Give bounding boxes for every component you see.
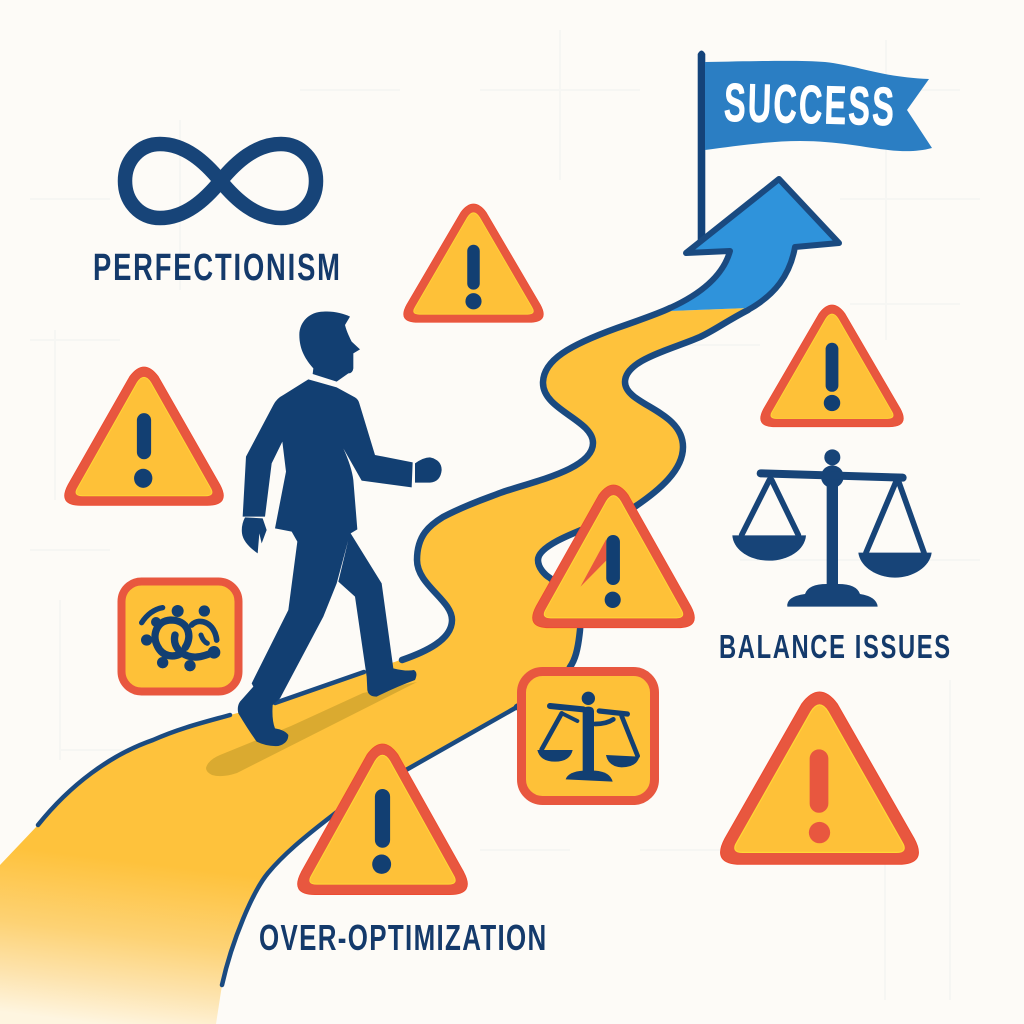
- warning triangle: upper right: [761, 305, 903, 427]
- flag banner: [705, 61, 932, 151]
- triangle fill: [310, 755, 455, 884]
- warning triangle: top centre: [404, 204, 543, 322]
- left hand: [242, 517, 267, 553]
- triangle border: [761, 305, 903, 427]
- road outline: behind walker: [275, 672, 364, 703]
- exclamation mark: [465, 245, 482, 309]
- triangle border: [533, 485, 694, 628]
- road surface: [0, 308, 748, 1024]
- warning triangle: left: [65, 367, 223, 505]
- triangle fill: [544, 496, 683, 618]
- warning triangle: bottom centre: [298, 744, 467, 895]
- icon: interlocking rings: [141, 605, 220, 671]
- triangle border: [65, 367, 223, 505]
- warning triangle: bottom right: [721, 692, 918, 864]
- triangle border: [404, 204, 543, 322]
- warning box: interlinked rings: [122, 582, 238, 692]
- triangle fill: [735, 705, 904, 852]
- warning triangle: centre on road: [533, 485, 694, 628]
- road outline: right winding edge: [517, 310, 748, 707]
- triangle fill: [771, 314, 893, 418]
- flag label: SUCCESS: [723, 74, 895, 137]
- road outline: upper winding edge: [402, 308, 670, 660]
- warning box: small scales: [522, 672, 654, 800]
- red slash mark: [580, 539, 606, 587]
- suit and legs: [238, 379, 416, 746]
- box border: [522, 672, 654, 800]
- winding yellow road: [0, 308, 748, 1024]
- icon: balance scales: [732, 449, 932, 607]
- triangle fill: [76, 377, 212, 496]
- walker shadow: [206, 682, 417, 776]
- exclamation mark: [134, 413, 152, 488]
- blue arrow at end of road: [670, 177, 839, 311]
- exclamation mark: [605, 535, 621, 608]
- road outline: lower left: [38, 715, 230, 825]
- triangle border: [298, 744, 467, 895]
- icon: infinity symbol: [125, 144, 316, 218]
- head: [299, 312, 360, 382]
- exclamation mark: [809, 749, 830, 843]
- triangle fill: [414, 213, 533, 314]
- arrow fill: [670, 177, 838, 311]
- road outline: lower right edge: [222, 707, 517, 985]
- triangle border: [721, 692, 918, 864]
- arrow outline: [670, 179, 839, 310]
- box border: [122, 582, 238, 692]
- right fist: [415, 457, 442, 483]
- label: over-optimization: OVER-OPTIMIZATION: [259, 918, 546, 958]
- label: perfectionism: PERFECTIONISM: [93, 247, 340, 289]
- label: balance issues: BALANCE ISSUES: [719, 629, 950, 666]
- icon: figure as scales: [537, 692, 639, 782]
- exclamation mark: [372, 789, 391, 874]
- flag with success label: [698, 50, 932, 246]
- exclamation mark: [824, 343, 840, 411]
- icon: walking businessman: [206, 312, 442, 776]
- flag pole: [698, 50, 705, 246]
